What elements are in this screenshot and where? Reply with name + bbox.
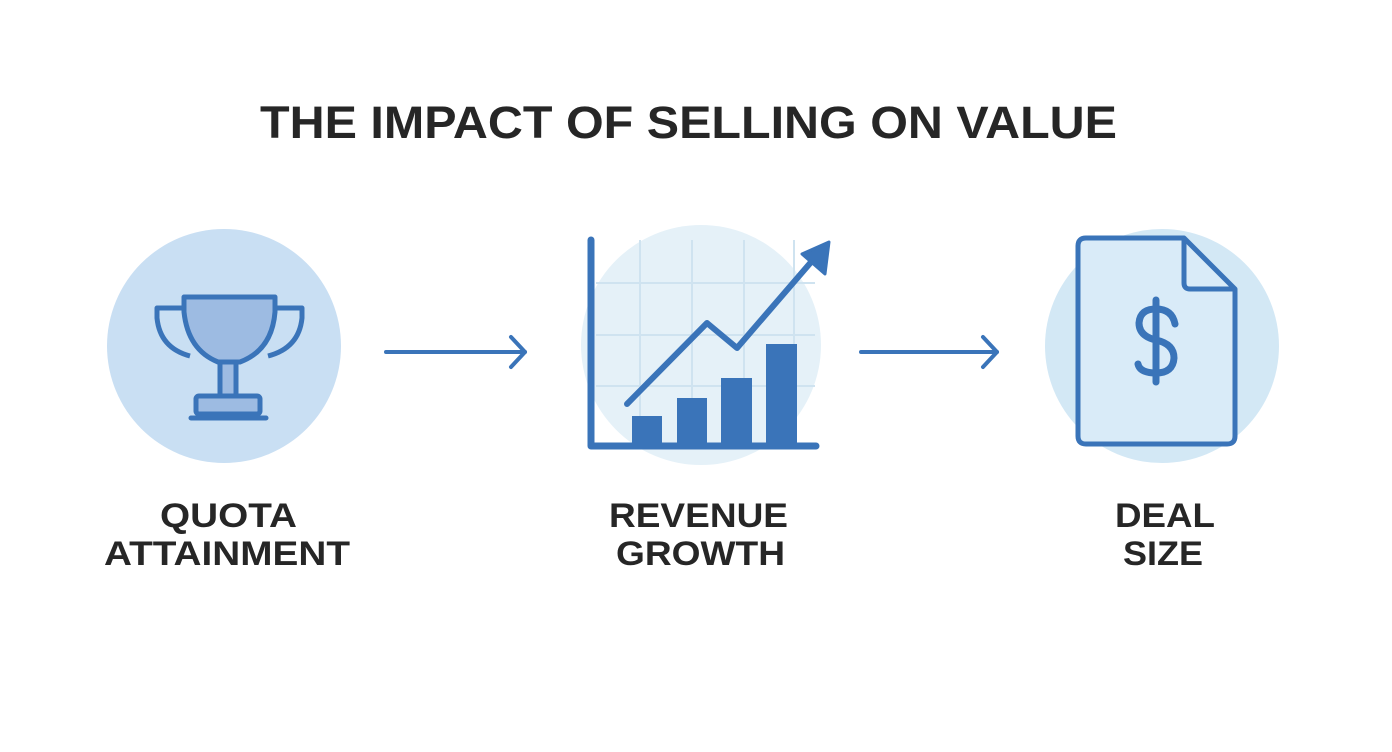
arrow 2 xyxy=(861,337,997,367)
label: quota attainment: ATTAINMENT xyxy=(104,535,350,573)
panel: revenue growth xyxy=(581,225,829,573)
label: revenue growth: REVENUE xyxy=(609,497,788,535)
icon: trophy circle xyxy=(107,229,341,463)
icon: growth chart xyxy=(581,225,829,465)
label: quota attainment: QUOTA xyxy=(160,497,297,535)
panel: deal size xyxy=(1045,229,1279,573)
title: THE IMPACT OF SELLING ON VALUE xyxy=(260,97,1117,148)
panel: quota attainment xyxy=(104,229,350,573)
icon: dollar document xyxy=(1045,229,1279,463)
label: deal size: DEAL xyxy=(1115,497,1215,535)
label: revenue growth: GROWTH xyxy=(616,535,785,573)
arrow 1 xyxy=(386,337,525,367)
label: deal size: SIZE xyxy=(1123,535,1203,573)
